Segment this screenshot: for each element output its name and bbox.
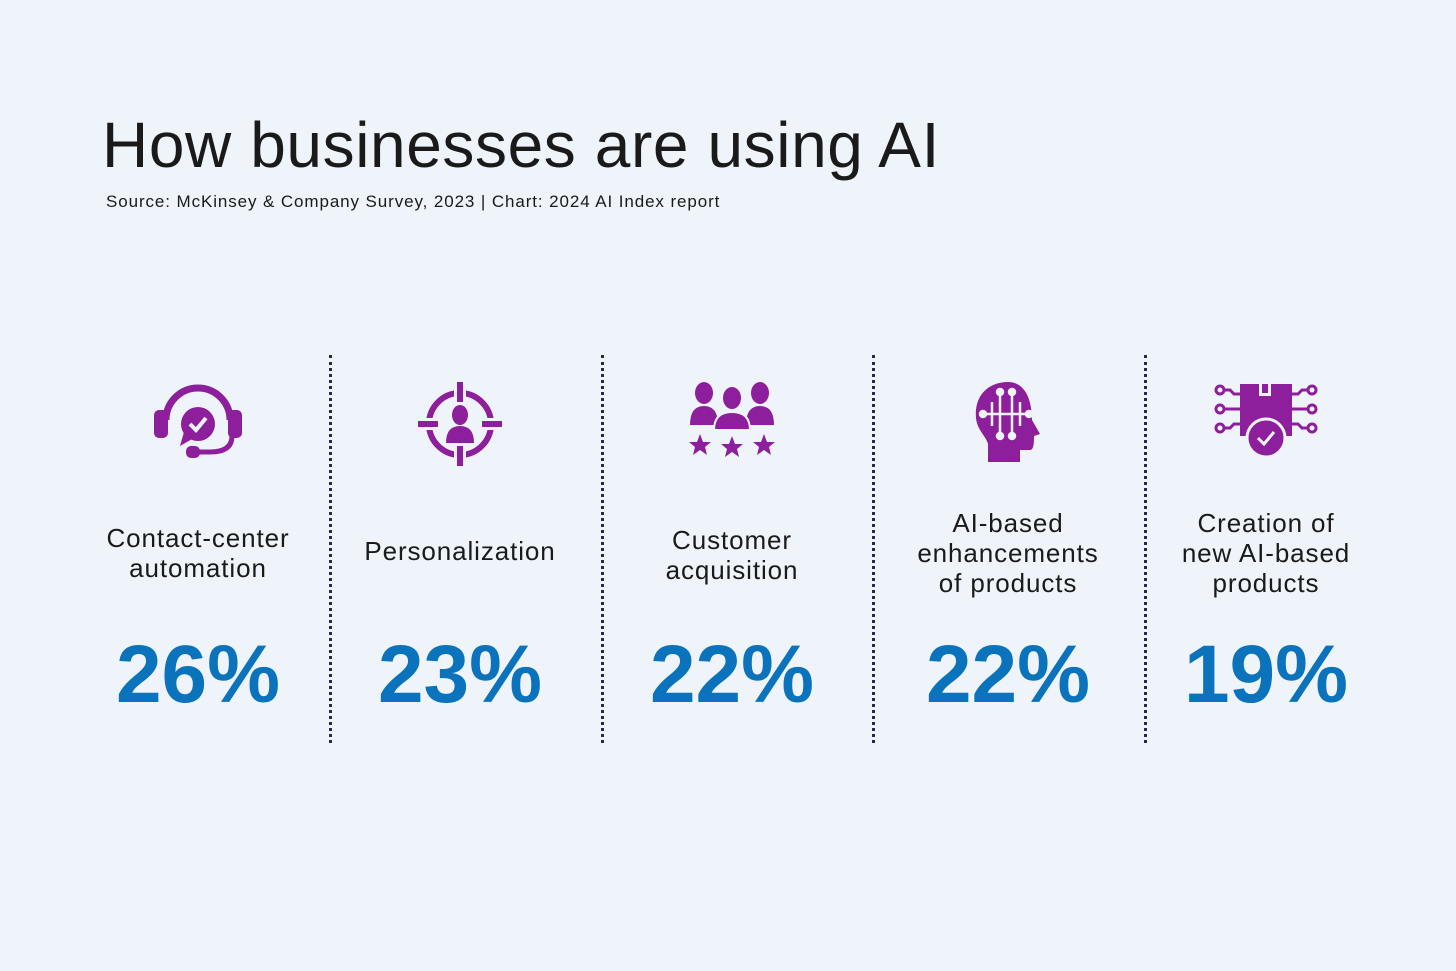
subtitle: source: Source: McKinsey & Company Survey, 2023 | Chart: 2024 AI Index report xyxy=(106,192,720,211)
label xyxy=(1182,508,1350,598)
number: 22% xyxy=(650,629,814,720)
label xyxy=(106,523,290,583)
panel: creation of new AI-based products xyxy=(1182,384,1350,720)
number: 23% xyxy=(378,629,542,720)
panel: personalization xyxy=(364,382,556,720)
label: Customer xyxy=(672,525,792,555)
label: automation xyxy=(129,553,267,583)
label xyxy=(917,508,1099,598)
title: How businesses are using AI xyxy=(102,109,940,181)
panel: AI-based enhancements xyxy=(917,382,1099,720)
label: enhancements xyxy=(917,538,1099,568)
icon: AI head xyxy=(976,382,1040,462)
icon: target person xyxy=(418,382,502,466)
label: Contact-center xyxy=(106,523,290,553)
label xyxy=(666,525,798,585)
icon: group with stars xyxy=(689,382,775,457)
icon: headset with chat xyxy=(154,384,242,458)
number: 22% xyxy=(926,629,1090,720)
number: 26% xyxy=(116,629,280,720)
dividers xyxy=(329,355,332,743)
label: Creation of xyxy=(1197,508,1335,538)
number: 19% xyxy=(1184,629,1348,720)
label: of products xyxy=(939,568,1077,598)
label: products xyxy=(1213,568,1319,598)
icon: box with circuits and check xyxy=(1214,384,1318,456)
label: new AI-based xyxy=(1182,538,1350,568)
label: Personalization xyxy=(364,536,556,566)
label: acquisition xyxy=(666,555,798,585)
panel: customer acquisition xyxy=(650,382,814,720)
label: AI-based xyxy=(952,508,1064,538)
panel: contact-center automation xyxy=(106,384,290,720)
